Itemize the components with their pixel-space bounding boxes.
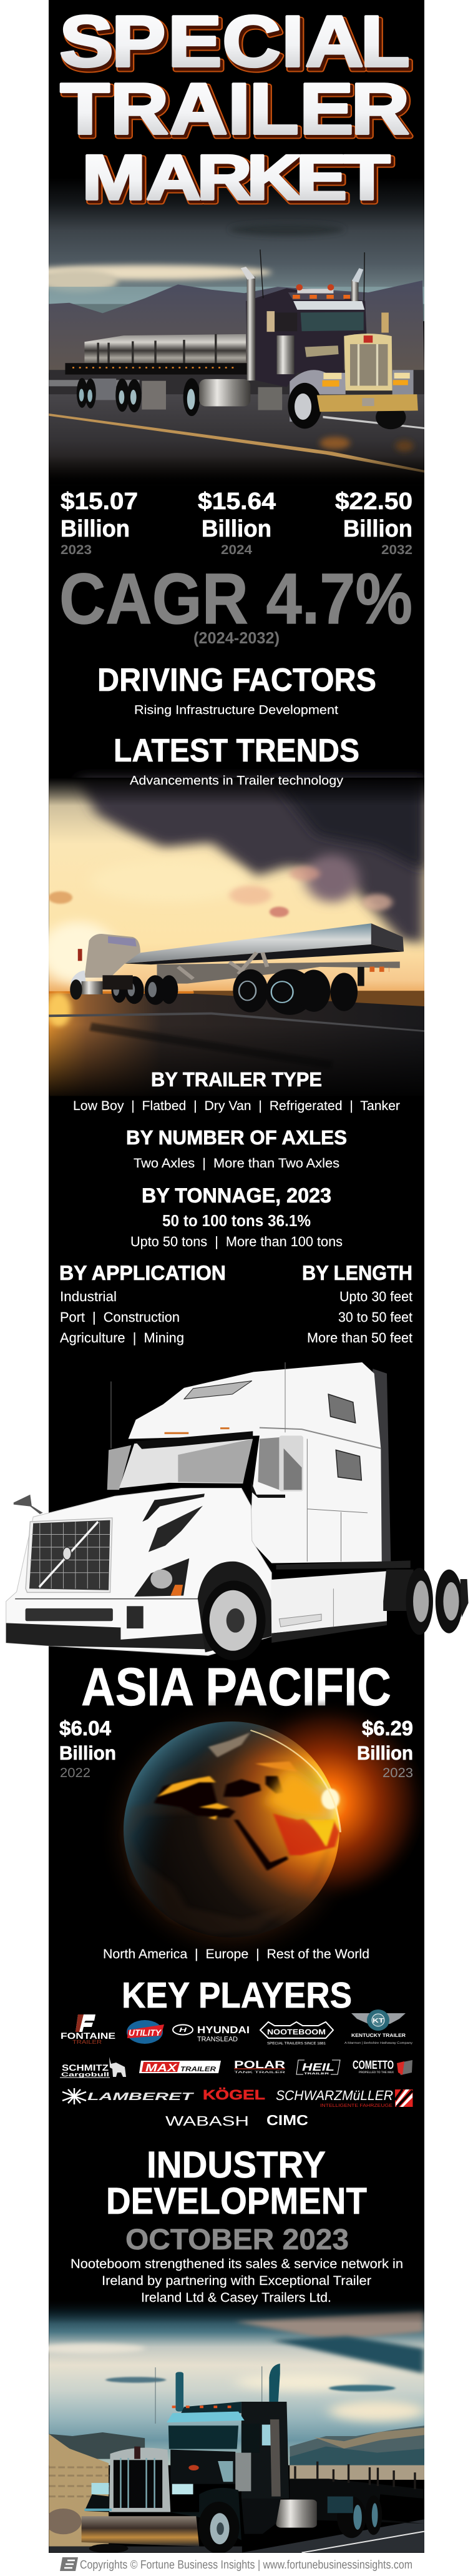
by application: Industrial <box>60 1289 117 1304</box>
logo: Schmitz Cargobull: SCHMITZ <box>62 2063 109 2073</box>
title line: SPECIAL: SPECIAL <box>59 1 410 82</box>
stat 2024: $15.64 <box>198 488 276 515</box>
logo: Kentucky Trailer: KENTUCKY TRAILER <box>351 2033 406 2038</box>
stat 2023: $15.07 <box>61 488 138 515</box>
by number of axles: BY NUMBER OF AXLES <box>126 1126 347 1149</box>
title line: MARKET: MARKET <box>82 142 390 213</box>
exhaust stacks <box>241 249 364 380</box>
CAGR figure: CAGR 4.7% <box>59 559 412 639</box>
by trailer type: BY TRAILER TYPE <box>151 1068 322 1091</box>
logo: Hyundai Translead: HYUNDAI <box>197 2025 250 2036</box>
logo: Kentucky Trailer: KT <box>373 2018 384 2024</box>
industry development description: Nooteboom strengthened its sales & service network in <box>71 2257 403 2271</box>
by application <box>59 1261 226 1345</box>
logo: Nooteboom: NOOTEBOOM <box>267 2028 326 2036</box>
cab <box>199 284 418 429</box>
industry development description: Ireland by partnering with Exceptional Trailer <box>102 2274 371 2288</box>
image: glowing globe <box>114 1698 422 1950</box>
logo: Nooteboom: SPECIAL TRAILERS SINCE 1881 <box>267 2041 326 2046</box>
by trailer type: Low Boy | Flatbed | Dry Van | Refrigerated | Tanker <box>73 1099 400 1113</box>
side skirts and rear axles <box>271 1560 469 1643</box>
driving factors <box>97 662 376 717</box>
development date: OCTOBER 2023 <box>125 2222 349 2256</box>
logo: Utility <box>127 2020 164 2044</box>
logo: Nooteboom <box>260 2022 333 2046</box>
stat 2024: Billion <box>202 516 271 542</box>
other regions: North America | Europe | Rest of the World <box>103 1947 369 1961</box>
title line: MARKET: MARKET <box>84 144 393 215</box>
logo: Kentucky Trailer <box>344 2009 413 2045</box>
logo: Cometto: COMETTO <box>353 2059 394 2072</box>
logo: Schwarzmüller: SCHWARZMüLLER <box>276 2088 393 2103</box>
logo: Schwarzmüller <box>276 2088 413 2108</box>
Asia Pacific heading: ASIA PACIFIC <box>81 1657 391 1717</box>
Asia Pacific 2022 value: 2022 <box>60 1766 90 1780</box>
flatbed trailer <box>124 923 404 986</box>
stat 2032 <box>335 488 412 557</box>
logo: Cometto: PROPELLED TO THE MAX <box>359 2071 394 2074</box>
footer strip <box>49 2553 424 2576</box>
footer copyright text: Copyrights © Fortune Business Insights | www.fortunebusinessinsights.com <box>80 2559 412 2572</box>
title line: TRAILER: TRAILER <box>60 68 409 149</box>
logo: Fontaine Trailer: FONTAINE <box>61 2031 115 2041</box>
logo: Polar Tank Trailer: POLAR <box>234 2059 285 2071</box>
cab <box>70 934 140 999</box>
industry development heading: DEVELOPMENT <box>106 2180 367 2222</box>
exhaust stacks <box>155 2364 280 2424</box>
latest trends: Advancements in Trailer technology <box>130 774 343 788</box>
stat 2023: 2023 <box>61 543 92 557</box>
logo: Fontaine Trailer: TRAILER <box>72 2039 102 2045</box>
Asia Pacific 2023 value: 2023 <box>383 1766 413 1780</box>
logo: Schmitz Cargobull: Cargobull <box>61 2071 109 2078</box>
by application: Agriculture | Mining <box>60 1330 184 1345</box>
trailer load <box>65 334 249 375</box>
key players heading: KEY PLAYERS <box>122 1975 352 2016</box>
stat 2024: 2024 <box>221 543 252 557</box>
logo: Max Trailer <box>139 2061 221 2074</box>
stat 2032: Billion <box>343 516 412 542</box>
industry development heading <box>106 2144 367 2222</box>
logo: Kögel: KÖGEL <box>203 2087 265 2103</box>
title <box>59 1 412 215</box>
logo: Max Trailer: TRAILER <box>180 2066 216 2073</box>
hero image: truck on highway <box>49 186 424 475</box>
by tonnage <box>130 1184 343 1249</box>
industry development description: Ireland Ltd & Casey Trailers Ltd. <box>141 2291 331 2305</box>
truck cab and hood <box>82 2402 317 2554</box>
trailer wheels <box>77 378 200 416</box>
Asia Pacific 2022 value <box>59 1717 116 1780</box>
logo: Polar Tank Trailer <box>234 2059 286 2074</box>
stat 2023 <box>61 488 138 557</box>
industry development heading: INDUSTRY <box>147 2144 326 2186</box>
trailer wheels <box>111 969 358 1015</box>
by application: BY APPLICATION <box>59 1261 226 1284</box>
flatbed trailer <box>290 2462 424 2538</box>
logo: Max Trailer: MAX <box>145 2062 178 2074</box>
Asia Pacific 2022 value: Billion <box>59 1742 116 1764</box>
by tonnage: BY TONNAGE, 2023 <box>142 1184 331 1207</box>
Asia Pacific 2022 value: $6.04 <box>59 1717 112 1740</box>
image: black truck in desert <box>36 2297 426 2554</box>
image: flatbed trailer at sunset <box>39 778 424 1102</box>
logo: Hyundai Translead: H <box>179 2027 187 2034</box>
driving factors: DRIVING FACTORS <box>97 662 376 698</box>
footer logo <box>60 2557 78 2571</box>
CAGR figure: (2024-2032) <box>193 628 280 647</box>
title line: MARKET: MARKET <box>84 144 393 215</box>
logo: Kentucky Trailer: A Marmon | Berkshire Hathaway Company <box>344 2041 413 2045</box>
stat 2023: Billion <box>61 516 130 542</box>
stat 2032: 2032 <box>381 543 412 557</box>
by length: Upto 30 feet <box>339 1289 412 1304</box>
logo: Polar Tank Trailer: TANK TRAILER <box>234 2071 286 2074</box>
by length: 30 to 50 feet <box>338 1309 412 1325</box>
Asia Pacific 2023 value: $6.29 <box>362 1717 413 1740</box>
market size stats <box>61 488 412 557</box>
by number of axles <box>126 1126 347 1171</box>
industry development description <box>71 2257 403 2305</box>
by length: BY LENGTH <box>302 1261 412 1284</box>
driving factors: Rising Infrastructure Development <box>134 703 338 717</box>
logo: Hyundai Translead <box>173 2025 250 2043</box>
key player logos <box>60 2009 413 2129</box>
by tonnage: 50 to 100 tons 36.1% <box>162 1211 311 1230</box>
logo: Lamberet: LAMBERET <box>87 2091 195 2103</box>
logo: Fontaine Trailer <box>61 2014 115 2045</box>
logo: Hyundai Translead: TRANSLEAD <box>197 2036 238 2043</box>
logo: Schmitz Cargobull <box>60 2057 126 2078</box>
stat 2032: $22.50 <box>335 488 412 515</box>
by tonnage: Upto 50 tons | More than 100 tons <box>130 1234 343 1249</box>
image: white semi truck <box>6 1362 469 1660</box>
title line: SPECIAL: SPECIAL <box>62 4 412 85</box>
latest trends: LATEST TRENDS <box>114 733 359 769</box>
by length <box>302 1261 412 1345</box>
logo: Heil Trailer <box>296 2060 340 2075</box>
by number of axles: Two Axles | More than Two Axles <box>134 1156 339 1171</box>
logo: Heil Trailer: TRAILER <box>304 2072 330 2075</box>
logo: Lamberet <box>62 2088 195 2104</box>
logo: Wabash: WABASH <box>165 2113 249 2129</box>
latest trends <box>114 733 359 788</box>
logo: Utility: UTILITY <box>129 2028 162 2038</box>
Asia Pacific 2023 value <box>357 1717 413 1780</box>
logo: Heil Trailer: HEIL <box>302 2061 334 2073</box>
by application: Port | Construction <box>60 1309 180 1325</box>
title line: TRAILER: TRAILER <box>62 71 412 152</box>
black infographic panel <box>49 0 424 2553</box>
by length: More than 50 feet <box>307 1330 412 1345</box>
Asia Pacific 2023 value: Billion <box>357 1742 413 1764</box>
front wheel <box>198 1562 271 1660</box>
title line: SPECIAL: SPECIAL <box>62 4 412 85</box>
stat 2024 <box>198 488 276 557</box>
logo: CIMC: CIMC <box>266 2112 308 2128</box>
logo: Schwarzmüller: INTELLIGENTE FAHRZEUGE <box>320 2103 393 2108</box>
by trailer type <box>73 1068 400 1113</box>
title line: TRAILER: TRAILER <box>62 71 412 152</box>
